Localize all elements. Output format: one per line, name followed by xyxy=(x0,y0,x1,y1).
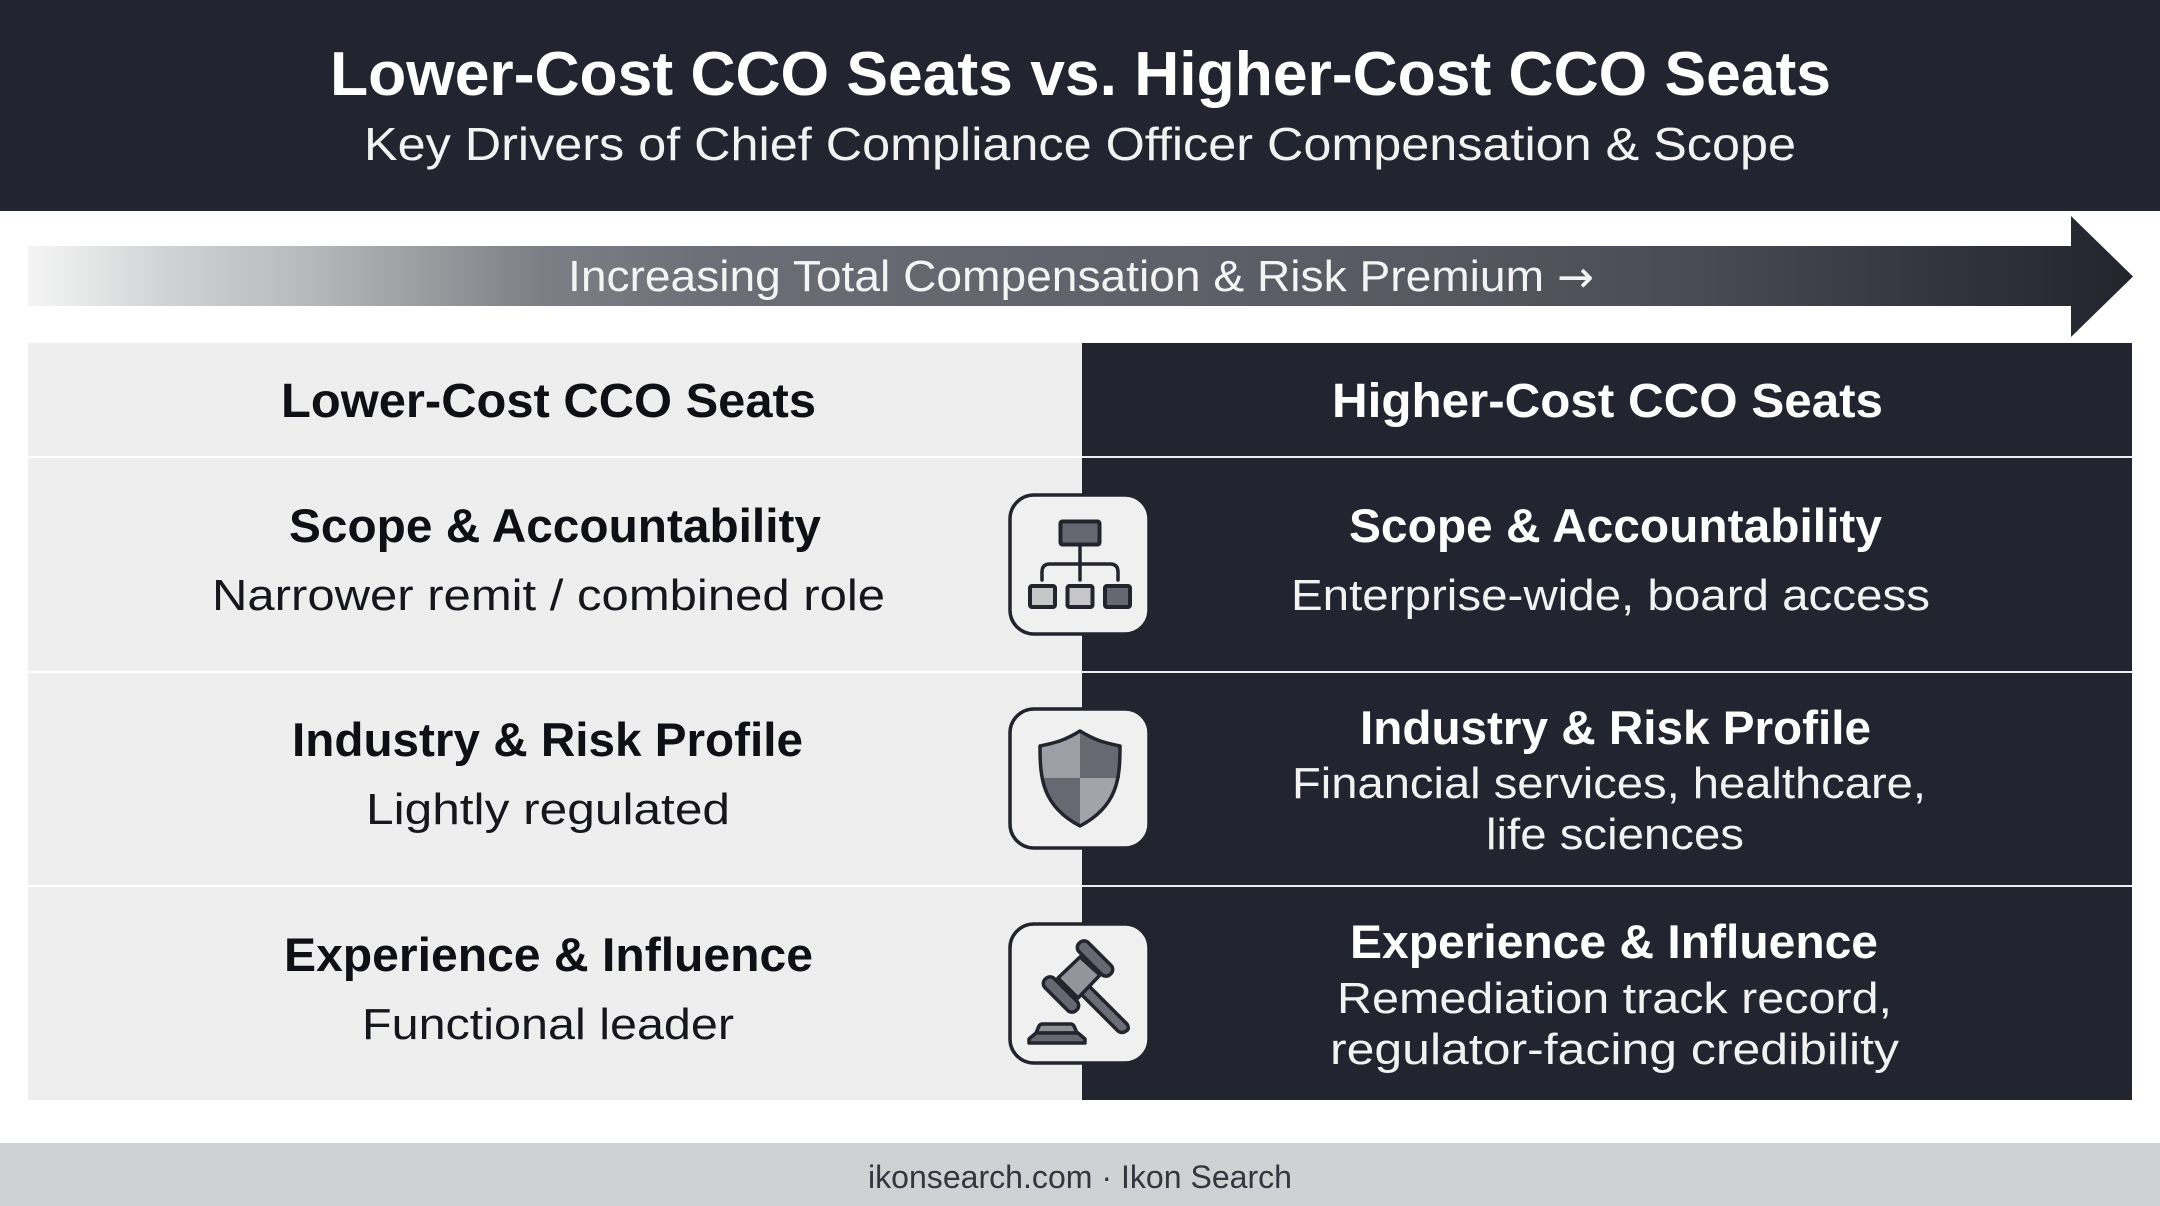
panel: higher-cost column xyxy=(1082,343,2132,1100)
gradient arrow: increasing compensation xyxy=(28,216,2133,337)
row: industry, lower xyxy=(292,713,803,834)
icon: shield xyxy=(1010,709,1149,848)
row: industry, lower: Lightly regulated xyxy=(366,785,730,834)
icon: gavel xyxy=(1010,924,1149,1063)
row: industry, higher: Industry & Risk Profile xyxy=(1360,701,1871,754)
arrow label glyph: → xyxy=(1557,252,1594,303)
row: industry, higher: Financial services, healthcare, xyxy=(1292,759,1926,808)
column heading: lower-cost: Lower-Cost CCO Seats xyxy=(281,375,816,428)
title: Lower-Cost CCO Seats vs. Higher-Cost CCO Seats xyxy=(330,40,1831,109)
row: experience, lower xyxy=(284,928,813,1049)
row: scope, higher xyxy=(1291,499,1930,620)
column heading: higher-cost: Higher-Cost CCO Seats xyxy=(1332,375,1883,428)
icon: org chart xyxy=(1010,495,1149,634)
row: experience, lower: Experience & Influence xyxy=(284,928,813,981)
header banner xyxy=(0,0,2160,211)
row: scope, lower: Narrower remit / combined role xyxy=(212,571,885,620)
row: experience, higher xyxy=(1330,915,1899,1074)
row: experience, higher: regulator-facing credibility xyxy=(1330,1025,1899,1074)
row: experience, higher: Experience & Influence xyxy=(1350,915,1878,968)
subtitle: Key Drivers of Chief Compliance Officer Compensation & Scope xyxy=(364,118,1796,170)
panel: lower-cost column xyxy=(28,343,1082,1100)
row: scope, lower: Scope & Accountability xyxy=(289,499,821,552)
row: industry, higher xyxy=(1292,701,1926,859)
row: experience, higher: Remediation track record, xyxy=(1337,974,1892,1023)
row: scope, higher: Scope & Accountability xyxy=(1349,499,1882,552)
footer: ikonsearch.com · Ikon Search xyxy=(868,1159,1292,1195)
row: scope, lower xyxy=(212,499,885,620)
row: experience, lower: Functional leader xyxy=(362,1000,734,1049)
row: scope, higher: Enterprise-wide, board access xyxy=(1291,571,1930,620)
footer xyxy=(0,1143,2160,1206)
arrow label: Increasing Total Compensation & Risk Premium xyxy=(568,252,1544,301)
row: industry, lower: Industry & Risk Profile xyxy=(292,713,803,766)
row: industry, higher: life sciences xyxy=(1486,810,1744,859)
